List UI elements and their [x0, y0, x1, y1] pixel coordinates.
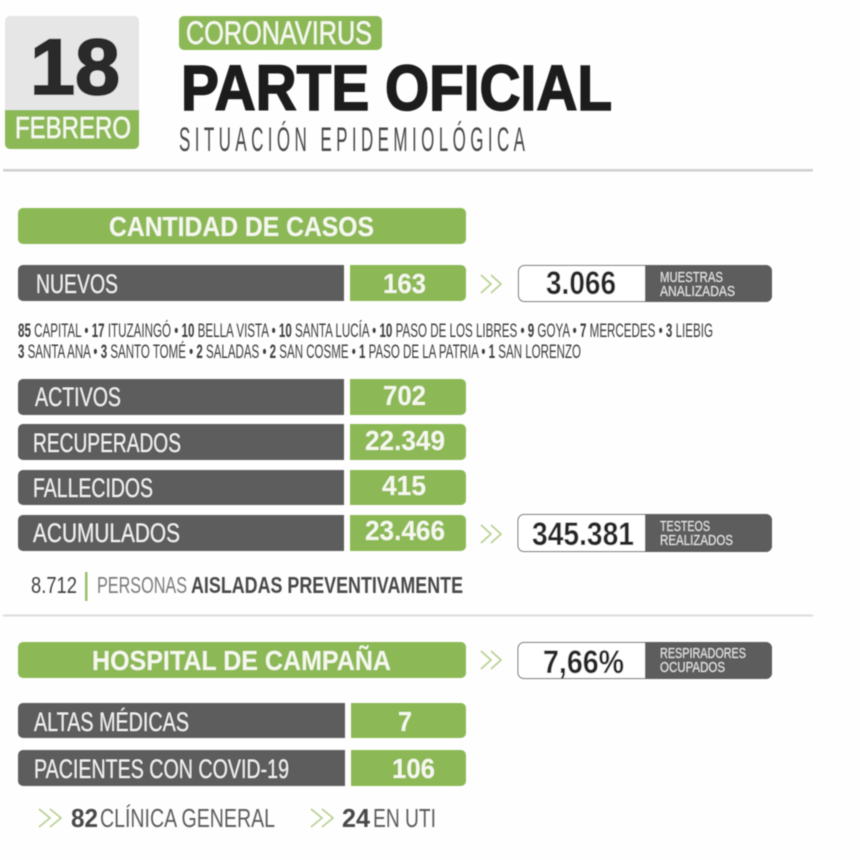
text block: cases by locality [18, 320, 713, 363]
date number: 18 [30, 22, 120, 111]
stat: clínica general: CLÍNICA GENERAL [100, 803, 275, 833]
row: acumulados: 23.466 [365, 515, 445, 546]
stat: en uti: 24 [342, 803, 371, 833]
row: pacientes con covid-19 [18, 750, 466, 786]
text block: cases by locality: 85 CAPITAL • 17 ITUZAINGÓ • 10 BELLA VISTA • 10 SANTA LUCÍA • 10 PASO DE LOS LIBRES • 9 GOYA • 7 MERCEDES • 3 LIEBIG [18, 320, 713, 342]
row: altas médicas: ALTAS MÉDICAS [34, 707, 189, 737]
title: PARTE OFICIAL [181, 52, 612, 124]
row: recuperados: 22.349 [365, 425, 445, 456]
icon: chevrons [481, 275, 501, 293]
icon: chevrons [481, 651, 501, 669]
row: activos [18, 379, 466, 415]
heading: cantidad de casos: CANTIDAD DE CASOS [109, 211, 374, 242]
text block: personas aisladas: AISLADAS PREVENTIVAMENTE [191, 572, 463, 598]
callout: respiradores ocupados [518, 642, 772, 680]
date month: FEBRERO [15, 110, 131, 145]
text block: personas aisladas: PERSONAS [97, 572, 187, 598]
row: activos: 702 [383, 380, 426, 411]
row: altas médicas: 7 [398, 706, 412, 737]
row: acumulados [18, 515, 466, 551]
stat: en uti: EN UTI [373, 803, 436, 833]
text block: personas aisladas: 8.712 [31, 572, 77, 598]
row: recuperados: RECUPERADOS [33, 428, 181, 458]
text block: personas aisladas [31, 572, 463, 601]
row: activos: ACTIVOS [35, 382, 121, 412]
callout: respiradores ocupados: OCUPADOS [660, 659, 725, 676]
text block: cases by locality: 3 SANTA ANA • 3 SANTO TOMÉ • 2 SALADAS • 2 SAN COSME • 1 PASO DE LA PATRIA • 1 SAN LORENZO [18, 342, 581, 363]
panel: cantidad de casos [18, 208, 772, 601]
row: fallecidos: 415 [382, 470, 426, 501]
row: nuevos [18, 265, 466, 301]
heading: hospital de campaña: HOSPITAL DE CAMPAÑA [92, 645, 391, 676]
callout: respiradores ocupados: 7,66% [543, 644, 624, 680]
date badge [5, 16, 139, 149]
callout: muestras analizadas [518, 265, 772, 302]
row: fallecidos: FALLECIDOS [33, 473, 153, 503]
callout: testeos realizados: REALIZADOS [660, 532, 733, 549]
callout: muestras analizadas: 3.066 [546, 265, 616, 301]
row: altas médicas [18, 703, 466, 738]
stat: en uti [311, 803, 436, 833]
callout: respiradores ocupados: RESPIRADORES [660, 645, 746, 662]
heading: hospital de campaña [18, 642, 466, 678]
row: nuevos: 163 [383, 268, 426, 299]
row: pacientes con covid-19: 106 [392, 753, 435, 784]
stat: clínica general [39, 803, 275, 833]
row: nuevos: NUEVOS [36, 269, 118, 299]
callout: testeos realizados [518, 514, 772, 552]
row: pacientes con covid-19: PACIENTES CON COVID-19 [34, 754, 289, 784]
icon: chevrons [481, 525, 501, 543]
stat: clínica general: 82 [71, 803, 98, 833]
callout: testeos realizados: 345.381 [532, 516, 634, 552]
coronavirus tag: CORONAVIRUS [186, 15, 372, 51]
callout: testeos realizados: TESTEOS [660, 518, 710, 535]
row: fallecidos [18, 470, 466, 505]
subtitle: SITUACIÓN EPIDEMIOLÓGICA [179, 119, 525, 159]
row: acumulados: ACUMULADOS [33, 518, 180, 548]
heading: cantidad de casos [18, 208, 466, 244]
panel: hospital de campaña [18, 642, 772, 833]
row: recuperados [18, 424, 466, 460]
callout: muestras analizadas: MUESTRAS [660, 269, 723, 286]
callout: muestras analizadas: ANALIZADAS [660, 283, 735, 300]
